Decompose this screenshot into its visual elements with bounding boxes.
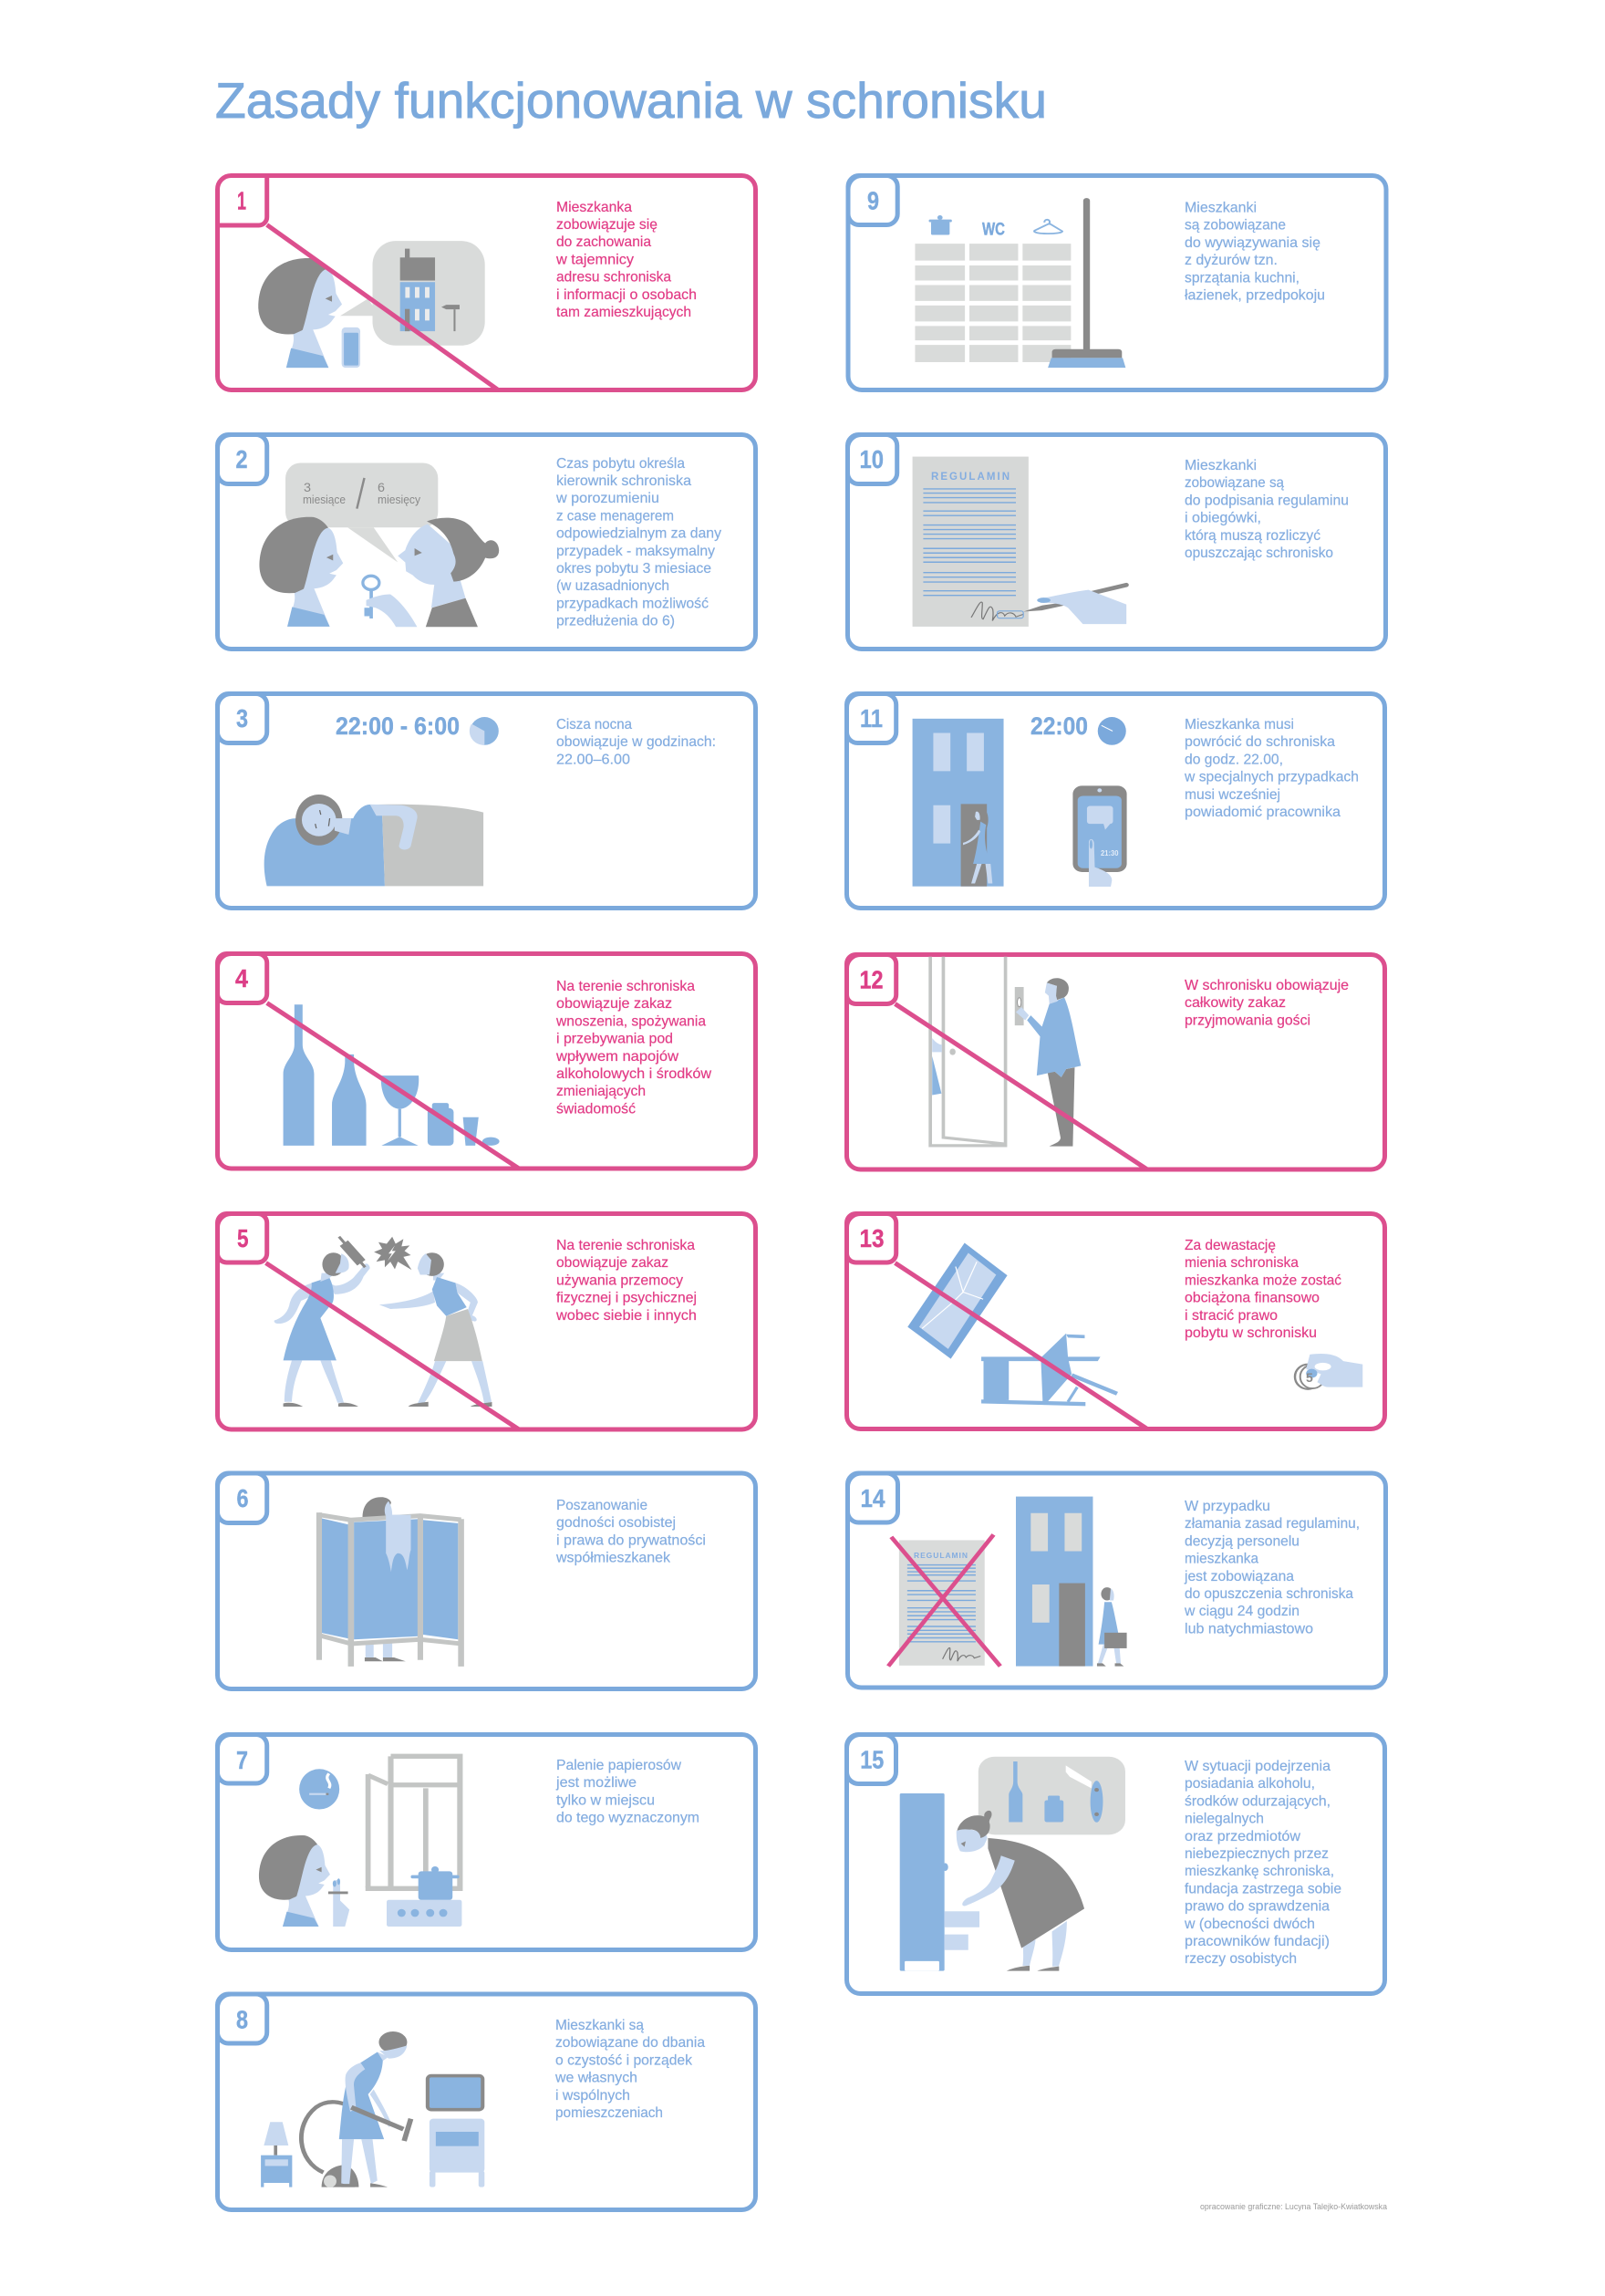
rule text [1185,1238,1341,1341]
number badge 7: 7 [236,1746,248,1774]
rule text: Palenie papierosów [556,1758,681,1773]
panel: rule 13 [846,1213,1384,1429]
starburst [374,1237,411,1270]
key and hand [363,576,417,627]
rule text: nielegalnych [1185,1812,1264,1827]
rule text: mienia schroniska [1185,1255,1299,1271]
rule text: Mieszkanki [1185,201,1257,215]
left woman with rolling pin [274,1237,370,1407]
door [930,957,1006,1146]
broken window [907,1242,1008,1359]
number badge 11 [846,693,896,743]
pink cross [888,1534,1000,1667]
rule text [1184,1759,1341,1967]
rule text: opuszczając schronisko [1185,545,1333,561]
rule text: pomieszczeniach [555,2105,663,2121]
rule text: do zachowania [556,234,651,250]
rule text: do godz. 22.00, [1185,752,1283,767]
number badge 13 [846,1213,896,1262]
number badge 6: 6 [237,1484,248,1512]
illustration: crossed-out rules, building and leaving woman [888,1497,1127,1667]
rule text: do podpisania regulaminu [1185,493,1349,508]
rule text: w ciągu 24 godzin [1184,1604,1300,1619]
nightstand and lamp [261,2122,292,2187]
vacuum cleaner [301,2102,358,2187]
left woman's head [259,517,343,627]
rule text: przyjmowania gości [1185,1013,1310,1028]
rule text: w specjalnych przypadkach [1184,770,1359,785]
rule text: i stracić prawo [1185,1308,1278,1324]
head [362,1497,392,1517]
towel [386,1515,411,1572]
rule text: przypadkach możliwość [556,596,709,611]
panel: rule 9 [848,175,1386,390]
rule text: godności osobistej [556,1515,676,1531]
prohibition line [266,1262,519,1429]
number badge 11: 11 [860,704,883,732]
woman with suitcase [1097,1587,1127,1667]
rule text: odpowiedzialnym za dany [556,526,721,542]
number badge 3: 3 [236,704,248,732]
right woman pointing [379,1252,492,1407]
rule text: w porozumieniu [555,491,659,506]
panel: rule 8 [217,1994,755,2209]
rule text [555,979,711,1117]
number badge 3 [217,693,267,743]
number badge 2: 2 [235,445,248,473]
panel frame [217,1994,755,2209]
stove and pot [387,1866,461,1927]
panel frame [217,693,755,909]
rule text [554,2018,705,2121]
rule text: we własnych [554,2071,637,2086]
rule text: używania przemocy [556,1273,683,1288]
rule text: W sytuacji podejrzenia [1185,1759,1331,1774]
number badge 8 [217,1994,267,2043]
illustration: building, clock and phone [913,717,1127,887]
illustration: man at the door [930,957,1081,1147]
rule text: z case menagerem [556,508,674,524]
rule text: mieszkanka może zostać [1185,1273,1341,1288]
sheet heading: REGULAMIN [931,472,1010,483]
bending woman [957,1811,1084,1971]
rules sheet [899,1540,985,1666]
panel frame [217,1473,755,1689]
rule text: obowiązuje zakaz [556,996,672,1012]
number badge 2 [217,434,267,483]
rule text: Mieszkanki [1185,458,1257,473]
rule text: w tajemnicy [555,252,634,267]
woman with cigarette [259,1835,330,1927]
rule text: Na terenie schroniska [556,979,695,994]
panel frame [846,1735,1384,1994]
speech bubble with building [340,241,485,346]
panel: rule 1 [217,175,755,390]
signature [971,602,1023,621]
rule text: okres pobytu 3 miesiace [556,561,711,577]
rule text: tam zamieszkujących [556,305,691,320]
rule text: Mieszkanka musi [1185,717,1294,732]
rule text [555,1758,699,1826]
rule text: Czas pobytu określa [556,456,685,472]
hand with cigarette [328,1878,349,1927]
illustration: woman searching a cupboard [900,1757,1125,1971]
rule text: fundacja zastrzega sobie [1185,1881,1341,1896]
building [1016,1497,1092,1667]
screen [316,1512,464,1667]
rule text: do wywiązywania się [1185,235,1320,251]
cupboard [900,1793,979,1971]
thought bubble with forbidden items [979,1757,1125,1834]
panel frame [846,693,1384,909]
rule text: musi wcześniej [1185,787,1280,803]
pen [1023,585,1126,612]
panel: rule 12 [846,954,1384,1169]
rule text [1185,458,1349,561]
clock [1098,717,1126,745]
rule text: łazienek, przedpokoju [1185,288,1325,303]
rule text: złamania zasad regulaminu, [1185,1516,1360,1532]
panel frame [217,434,755,649]
bubble text: 6 months: miesięcy [378,493,420,506]
rule text: obowiązuje zakaz [556,1255,668,1271]
panel frame [217,954,755,1169]
panel frame [848,175,1386,390]
rule text: wpływem napojów [555,1049,678,1065]
rule text [1185,978,1349,1028]
panel frame [217,1213,755,1429]
rule text: o czystość i porządek [555,2052,693,2068]
number badge 9: 9 [867,186,879,215]
rule text: Mieszkanki są [555,2018,644,2033]
rule text [1184,717,1359,820]
phone [1072,785,1127,872]
clock pie [470,717,499,745]
night hours label: 22:00 - 6:00 [336,712,460,740]
rule text: prawo do sprawdzenia [1185,1899,1330,1915]
schedule grid [915,244,1071,362]
number badge 9 [848,175,897,224]
rule text: przypadek - maksymalny [556,544,715,559]
rule text: zobowiązane do dbania [555,2035,705,2051]
panel: rule 15 [846,1735,1384,1994]
rule text: i obiegówki, [1185,511,1261,526]
rule text: współmieszkanek [555,1551,671,1566]
prohibition line [267,224,499,390]
rule text: obowiązuje w godzinach: [556,734,716,750]
rule text: obciążona finansowo [1185,1291,1320,1306]
rule text: Za dewastację [1185,1238,1276,1253]
rule text: wnoszenia, spożywania [555,1013,706,1029]
number badge 13: 13 [859,1224,885,1252]
rule text [555,1238,697,1324]
number badge 1: 1 [237,186,246,215]
woman's head [258,258,342,368]
prohibition line [896,1262,1147,1429]
rule text: całkowity zakaz [1185,995,1286,1011]
number badge 5 [217,1213,267,1262]
illustration: woman behind folding screen [316,1497,464,1667]
panel: rule 11 [846,693,1384,909]
number badge 6 [217,1473,267,1523]
intercom [1015,987,1024,1025]
number badge 1 [217,175,267,225]
illustration: two women and key [259,463,499,627]
rule text: alkoholowych i środków [556,1066,711,1082]
curfew time label: 22:00 [1030,712,1088,740]
rule text [555,200,697,320]
phone clock text: 21:30 [1101,849,1119,857]
panel frame [846,954,1384,1169]
rule text: Cisza nocna [556,717,632,732]
illustration: sleeping woman and clock [264,717,499,886]
illustration: two women fighting [274,1237,492,1407]
rule text: kierownik schroniska [556,473,691,489]
rule text [556,717,716,767]
TV and cabinet [428,2076,484,2187]
speech bubble [285,463,438,563]
coin value: 5 [1306,1370,1313,1385]
rule text: 22.00–6.00 [556,752,630,767]
rule text: rzeczy osobistych [1185,1951,1297,1967]
illustration: smoking by the window [259,1756,461,1927]
window [366,1756,460,1888]
rule text: mieszkanka [1185,1552,1258,1567]
rule text: świadomość [556,1101,636,1117]
rule text: pracowników fundacji) [1185,1934,1330,1949]
panel: rule 14 [848,1473,1386,1688]
rule text [555,456,721,629]
hand [1037,590,1126,624]
panel: rule 2 [217,434,755,649]
rule text [555,1498,706,1566]
rule text: niebezpiecznych przez [1185,1846,1329,1862]
woman in doorway [963,810,992,883]
illustration: woman keeping address secret [258,241,485,368]
hand and coin [1295,1354,1362,1389]
rule text: i przebywania pod [556,1032,673,1047]
rule text: w (obecności dwóch [1184,1917,1315,1932]
rule text: wobec siebie i innych [555,1308,697,1324]
number badge 15 [846,1735,896,1784]
broom [1048,198,1125,368]
title: Zasady funkcjonowania w schronisku [215,72,1047,129]
rule text: lub natychmiastowo [1185,1621,1313,1636]
panel frame [846,1213,1384,1429]
number badge 12 [846,954,896,1003]
vacuum tube [351,2107,411,2141]
building [913,719,1004,887]
woman [339,2031,407,2187]
rule text: Poszanowanie [556,1498,647,1513]
rule text: są zobowiązane [1185,218,1286,234]
rule text: zobowiązuje się [556,217,658,233]
panel frame [217,1735,755,1950]
rule text: Mieszkanka [556,200,632,215]
illustration: broken window and chair [907,1242,1362,1406]
rule text: adresu schroniska [556,270,671,286]
number badge 10 [848,434,897,483]
rule text [1184,1499,1360,1636]
finger [1089,839,1112,887]
prohibition line [896,1003,1147,1169]
rule text: powiadomić pracownika [1185,805,1341,820]
rule text: posiadania alkoholu, [1185,1776,1315,1792]
number badge 10: 10 [859,445,884,473]
illustration: signing the rules [913,457,1126,627]
phone [342,327,360,368]
rule text: decyzją personelu [1185,1533,1300,1549]
rule text: sprzątania kuchni, [1185,270,1300,286]
rule text: Na terenie schroniska [556,1238,695,1253]
number badge 14: 14 [861,1484,885,1512]
rule text: do opuszczenia schroniska [1185,1586,1353,1602]
panel: rule 7 [217,1735,755,1950]
panel: rule 3 [217,693,755,909]
rule text: zobowiązane są [1185,475,1284,491]
number badge 12: 12 [859,965,883,994]
rule text: (w uzasadnionych [556,578,669,594]
rule text: tylko w miejscu [556,1792,655,1808]
panel frame [217,175,755,390]
rule text: jest zobowiązana [1184,1569,1294,1584]
rule text: jest możliwe [555,1775,637,1791]
person behind door [932,1038,942,1096]
bubble text: 6 months: 6 [378,480,385,494]
rule text: którą muszą rozliczyć [1185,528,1320,544]
panel: rule 6 [217,1473,755,1689]
rule text: mieszkankę schroniska, [1185,1864,1334,1879]
number badge 7 [217,1735,267,1783]
panel frame [848,434,1386,649]
prohibition line [267,1003,519,1169]
number badge 8: 8 [236,2005,248,2034]
number badge 14 [848,1473,897,1522]
right woman [398,518,499,627]
hanger icon [1034,220,1062,234]
bubble text: 3 months: 3 [304,480,311,494]
rule text: powrócić do schroniska [1185,734,1335,750]
credit line: opracowanie graficzne: Lucyna Talejko-Kwiatkowska [1200,2202,1388,2212]
sleeping woman [264,795,483,886]
rule text: do tego wyznaczonym [556,1811,699,1826]
rule text: i wspólnych [555,2088,630,2104]
rule text: W przypadku [1185,1499,1270,1514]
rule text: pobytu w schronisku [1185,1325,1317,1341]
pot icon [929,215,952,234]
illustration: bottles and glasses [284,1004,500,1146]
legs behind screen [365,1643,406,1661]
rule text: zmieniających [556,1084,646,1099]
illustration: woman vacuuming [261,2031,484,2187]
panel: rule 10 [848,434,1386,649]
rule text: i informacji o osobach [556,287,697,303]
rule text: W schronisku obowiązuje [1185,978,1349,993]
number badge 5: 5 [237,1224,248,1252]
sheet heading: REGULAMIN [914,1551,968,1560]
rules sheet [913,457,1029,627]
panel: rule 4 [217,954,755,1169]
rule text: z dyżurów tzn. [1185,253,1278,268]
rule text [1185,201,1325,303]
rule text: przedłużenia do 6) [556,614,675,629]
bubble text: 6 months [378,480,420,506]
panel frame [848,1473,1386,1688]
rule text: i prawa do prywatności [556,1532,706,1548]
number badge 15: 15 [860,1745,884,1773]
bubble text: 3 months: miesiące [303,493,346,506]
panel: rule 5 [217,1213,755,1429]
rule text: fizycznej i psychicznej [556,1291,697,1306]
number badge 4 [217,954,267,1003]
WC column label: WC [982,221,1005,239]
broken chair [981,1334,1117,1406]
illustration: duty schedule and broom [915,198,1125,368]
rule text: oraz przedmiotów [1185,1829,1300,1844]
rule text: środków odurzających, [1185,1793,1331,1809]
man [1016,978,1081,1147]
number badge 4: 4 [235,964,248,992]
smoking sign [299,1769,339,1810]
bubble text: 3 months [303,480,346,506]
